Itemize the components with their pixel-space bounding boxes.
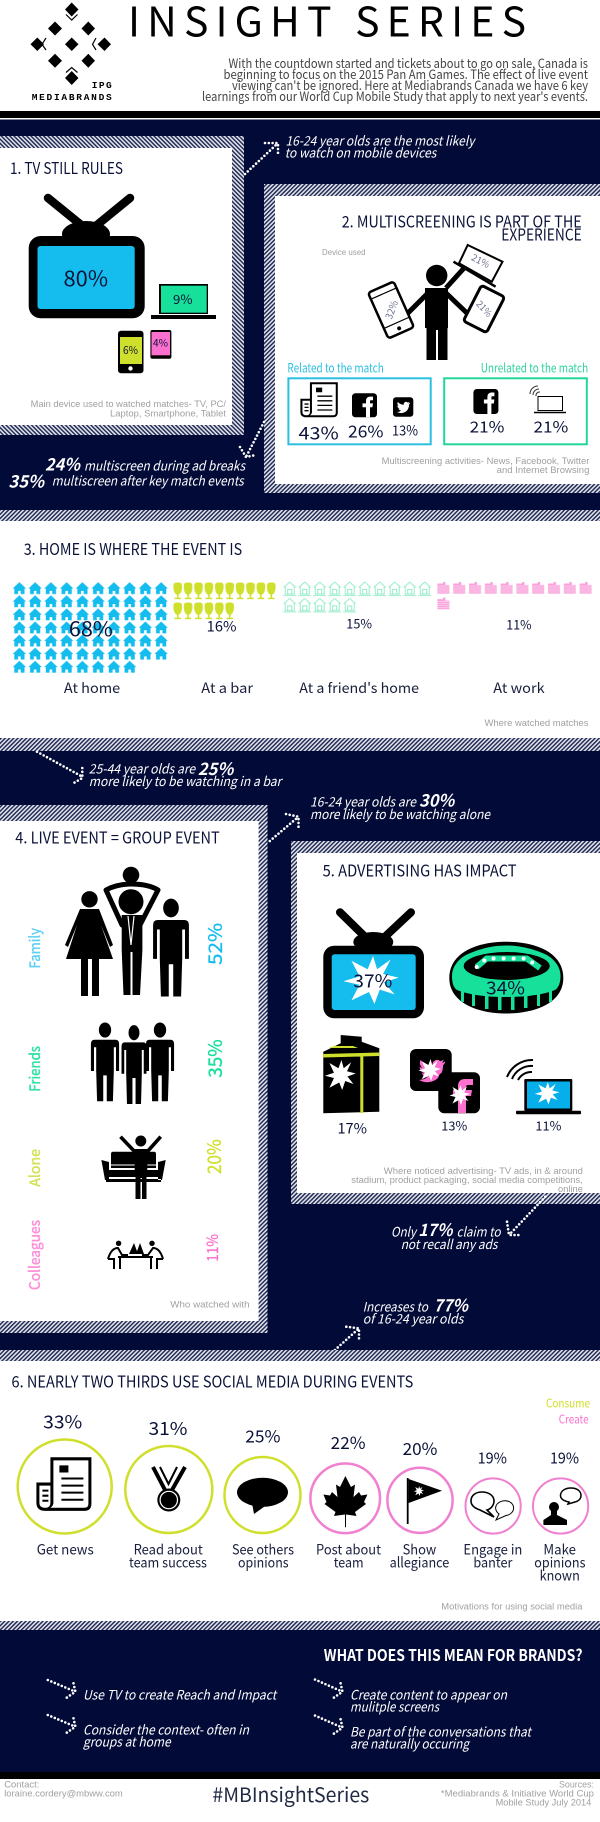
footer: sources <box>441 1779 594 1809</box>
row: family 52% <box>24 867 228 996</box>
callout: 17% no recall: not recall any ads <box>401 1234 499 1253</box>
row: colleagues 11% <box>24 1220 223 1290</box>
icon: tablet 4% <box>150 330 171 359</box>
item: engage in banter 19%: banter <box>473 1552 513 1572</box>
icon: big TV 80% <box>29 198 145 318</box>
header: white band <box>0 0 600 111</box>
row: family 52%: 52% <box>201 923 228 965</box>
callout: 77% of 16-24: 77% <box>434 1292 470 1317</box>
intro text <box>202 53 588 105</box>
box: related to the match: 13% <box>392 420 418 440</box>
callout: 25-44 in a bar <box>37 752 283 790</box>
item: engage in banter 19% <box>463 1447 522 1572</box>
box: unrelated to the match: 21% <box>534 416 568 438</box>
icon: stadium 34%: 34% <box>486 974 525 1000</box>
panel: 2. Multiscreening <box>264 184 600 493</box>
callout: 16-24 alone: 16-24 year olds are <box>310 792 418 811</box>
item: make opinions known 19%: 19% <box>550 1447 579 1468</box>
callout: 17% no recall: 17% <box>418 1216 454 1241</box>
icon: smartphone 6%: 6% <box>123 342 138 358</box>
navy background: middle <box>0 751 600 1350</box>
callout: 25-44 in a bar: 25-44 year olds are <box>89 759 197 778</box>
row: alone 20%: Alone <box>24 1149 45 1187</box>
item: post about team 22%: 22% <box>331 1429 366 1454</box>
row: alone 20% <box>24 1136 227 1199</box>
icon: stadium 34% <box>449 942 563 1014</box>
footer: contact: loraine.cordery@mbww.com <box>4 1789 123 1800</box>
item: see others opinions 25% <box>224 1422 300 1572</box>
panel: 1. TV still rules <box>0 136 244 435</box>
item: show allegiance 20%: allegiance <box>390 1552 450 1572</box>
callout: multiscreen breaks: multiscreen during ad breaks <box>84 456 247 475</box>
takeaway: conversations: are naturally occuring <box>350 1733 471 1752</box>
item: show allegiance 20%: 20% <box>403 1435 437 1460</box>
item: see others opinions 25%: 25% <box>245 1422 280 1447</box>
item: get news 33%: Get news <box>37 1539 94 1559</box>
icon: wifi laptop 11% <box>507 1060 581 1135</box>
item: read about team success 31% <box>125 1415 212 1572</box>
heading 4: 4. LIVE EVENT = GROUP EVENT <box>15 824 220 848</box>
icon: smartphone 6% <box>118 331 144 373</box>
icon: social tiles 13%: 13% <box>441 1116 468 1135</box>
logo: IPG Mediabrands: IPG <box>92 80 112 91</box>
callout: multiscreen breaks: 35% <box>8 467 46 492</box>
pictogram: at home 68%: At home <box>64 678 120 698</box>
takeaway: create content <box>315 1680 508 1715</box>
callout: 77% of 16-24: Increases to <box>363 1297 429 1316</box>
callout: multiscreen breaks <box>8 422 264 492</box>
box: related to the match: 43% <box>298 420 339 445</box>
callout: 77% of 16-24: of 16-24 year olds <box>363 1308 465 1327</box>
pictogram: at home 68% <box>12 582 169 698</box>
item: make opinions known 19% <box>533 1447 588 1585</box>
header divider <box>0 111 600 118</box>
caption: stadium, product packaging, social media competitions, <box>351 1175 583 1186</box>
item: see others opinions 25%: See others <box>232 1539 294 1559</box>
pictogram: at a bar 16%: At a bar <box>201 678 254 698</box>
row: friends 35%: 35% <box>201 1039 228 1078</box>
caption: Main device used to watched matches- TV, PC/ <box>31 399 226 410</box>
box: unrelated to the match <box>444 358 588 444</box>
heading 6: 6. NEARLY TWO THIRDS USE SOCIAL MEDIA DURING EVENTS <box>12 1369 413 1393</box>
legend: Create <box>559 1410 589 1427</box>
panel: 4. Live event = group event <box>0 805 268 1333</box>
icon: TV 37% <box>323 912 424 1018</box>
item: make opinions known 19%: opinions <box>534 1552 586 1572</box>
legend: Consume <box>546 1394 590 1411</box>
icon: product carton 17%: 17% <box>338 1118 367 1139</box>
heading 2 <box>342 208 582 246</box>
callout: mobile devices: 16-24 year olds are the most likely <box>286 131 477 150</box>
callout: 17% no recall: claim to <box>457 1222 502 1241</box>
icon: product carton 17% <box>323 1035 379 1139</box>
item: post about team 22% <box>310 1429 382 1572</box>
takeaway: create content: Create content to appear on <box>350 1684 508 1703</box>
icon: tablet 4%: 4% <box>153 335 168 350</box>
pictogram: at a friend's home 15% <box>282 581 432 698</box>
takeaway: conversations: Be part of the conversations that <box>350 1721 533 1740</box>
callout: multiscreen breaks: 24% <box>45 451 82 476</box>
callout: 16-24 alone: 30% <box>419 787 456 812</box>
pictogram: at a bar 16%: 16% <box>207 616 236 637</box>
legend <box>546 1394 590 1427</box>
item: get news 33% <box>18 1408 112 1559</box>
item: see others opinions 25%: opinions <box>238 1552 289 1572</box>
item: engage in banter 19%: 19% <box>478 1447 507 1468</box>
item: get news 33%: 33% <box>43 1408 82 1434</box>
logo: IPG Mediabrands <box>30 2 112 103</box>
callout: 25-44 in a bar: more likely to be watching in a bar <box>89 771 283 790</box>
heading 3: 3. HOME IS WHERE THE EVENT IS <box>24 536 242 560</box>
panel: 5. Advertising has impact <box>291 841 600 1204</box>
figure with devices: 32% <box>380 298 401 321</box>
item: read about team success 31%: Read about <box>134 1539 203 1559</box>
device label: Device used <box>322 247 366 257</box>
row: friends 35% <box>24 1022 228 1104</box>
item: engage in banter 19%: Engage in <box>463 1539 522 1559</box>
item: show allegiance 20% <box>387 1435 453 1572</box>
panel: 6. Social media use <box>0 1350 600 1621</box>
callout: 16-24 alone: more likely to be watching alone <box>310 804 492 823</box>
caption: Motivations for using social media <box>441 1601 583 1612</box>
box: related to the match: 26% <box>348 419 384 443</box>
icon: big TV 80%: 80% <box>64 263 108 293</box>
icon: wifi laptop 11%: 11% <box>535 1116 562 1135</box>
navy background: upper <box>0 120 600 510</box>
caption: online <box>558 1184 583 1195</box>
icon: laptop 9%: 9% <box>173 289 193 308</box>
item: read about team success 31%: team success <box>129 1552 207 1572</box>
takeaway: conversations <box>315 1716 533 1752</box>
item: read about team success 31%: 31% <box>148 1415 188 1441</box>
box: unrelated to the match: 21% <box>470 416 504 438</box>
takeaway: consider context: Consider the context- often in <box>83 1719 250 1738</box>
item: make opinions known 19%: known <box>540 1565 580 1585</box>
footer bar <box>0 1772 600 1779</box>
box: related to the match <box>287 358 431 445</box>
box: related to the match: Related to the match <box>287 358 384 377</box>
pictogram: at work 11%: 11% <box>506 615 532 634</box>
item: post about team 22%: Post about <box>316 1539 382 1559</box>
callout: 17% no recall <box>391 1197 545 1253</box>
caption <box>31 399 226 420</box>
callout: 25-44 in a bar: 25% <box>198 755 235 780</box>
callout: mobile devices <box>245 131 477 174</box>
icon: laptop 9% <box>151 284 216 319</box>
pictogram: at work 11% <box>435 580 593 698</box>
pictogram: at a friend's home 15%: 15% <box>346 614 372 633</box>
caption: and Internet Browsing <box>497 465 589 476</box>
footer: sources: Mobile Study July 2014 <box>496 1798 591 1809</box>
pictogram: at home 68%: 68% <box>69 613 113 642</box>
footer: sources: *Mediabrands & Initiative World Cup <box>441 1789 594 1800</box>
item: show allegiance 20%: Show <box>403 1539 436 1559</box>
callout: 77% of 16-24 <box>335 1292 470 1350</box>
callout: 16-24 alone <box>270 787 492 841</box>
pictogram: at work 11%: At work <box>493 678 545 698</box>
row: friends 35%: Friends <box>24 1046 45 1092</box>
takeaway: use TV <box>48 1680 278 1703</box>
pictogram: at a bar 16% <box>172 582 276 698</box>
panel: what does this mean for brands <box>0 1621 600 1772</box>
caption: Where noticed advertising- TV ads, in & around <box>384 1166 583 1177</box>
caption: Who watched with <box>170 1300 250 1311</box>
figure with devices: 21% <box>473 297 496 320</box>
figure with devices: 21% <box>469 250 493 271</box>
panel: 3. Home is where the event is <box>0 510 600 751</box>
callout: mobile devices: to watch on mobile devices <box>285 142 438 161</box>
caption <box>382 456 589 476</box>
footer: contact <box>4 1779 123 1800</box>
takeaway: create content: mulitple screens <box>350 1696 441 1715</box>
footer: hashtag: #MBInsightSeries <box>212 1779 369 1808</box>
footer: sources: Sources: <box>559 1779 594 1790</box>
caption: Laptop, Smartphone, Tablet <box>110 408 226 420</box>
icon: TV 37%: 37% <box>353 968 392 994</box>
pictogram: at a friend's home 15%: At a friend's home <box>299 678 419 698</box>
item: make opinions known 19%: Make <box>543 1539 576 1559</box>
takeaway: consider context: groups at home <box>83 1732 172 1751</box>
row: family 52%: Family <box>24 928 45 968</box>
footer: contact: Contact: <box>4 1779 39 1790</box>
caption: Where watched matches <box>484 718 589 729</box>
heading 5: 5. ADVERTISING HAS IMPACT <box>323 858 517 882</box>
item: post about team 22%: team <box>334 1552 364 1572</box>
caption <box>351 1166 583 1195</box>
takeaway: consider context <box>48 1715 250 1751</box>
row: colleagues 11%: Colleagues <box>24 1220 45 1290</box>
logo: IPG Mediabrands: MEDIABRANDS <box>32 92 112 103</box>
caption: Multiscreening activities- News, Facebook, Twitter <box>382 456 589 467</box>
icon: social tiles 13% <box>410 1049 480 1135</box>
heading 1: 1. TV STILL RULES <box>10 155 123 179</box>
row: colleagues 11%: 11% <box>201 1234 223 1262</box>
heading 2: EXPERIENCE <box>501 222 582 246</box>
figure with devices <box>368 245 505 360</box>
callout: 17% no recall: Only <box>391 1222 418 1241</box>
callout: multiscreen breaks: multiscreen after key match events <box>52 471 245 490</box>
takeaway: use TV: Use TV to create Reach and Impact <box>83 1684 278 1703</box>
row: alone 20%: 20% <box>200 1139 227 1174</box>
